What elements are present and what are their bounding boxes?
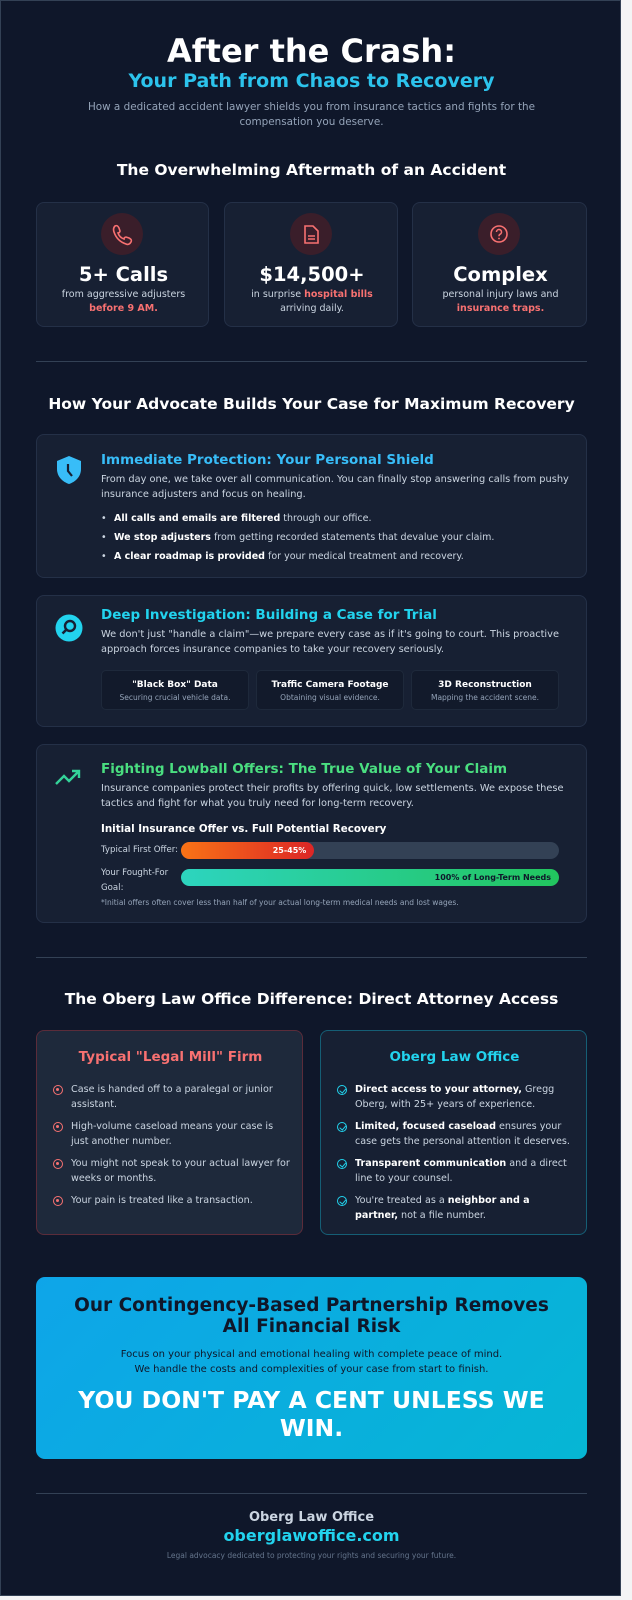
- CTA panel: We handle the costs and complexities of your case from start to finish.: [135, 1364, 488, 1375]
- list: positives: Limited, focused caseload ensures your case gets the personal attention it deserves.: [355, 1121, 570, 1147]
- icon: question: [478, 213, 520, 255]
- stat card: calls: from aggressive adjusters: [62, 289, 185, 300]
- bar chart: 25-45%: [273, 846, 306, 855]
- panel: immediate protection: Immediate Protection: Your Personal Shield: [101, 452, 434, 468]
- icon: document: [290, 213, 332, 255]
- evidence box: black box: [101, 670, 249, 710]
- footer: Oberg Law Office: [249, 1510, 374, 1525]
- investigation title: Deep Investigation: Building a Case for Trial: [101, 607, 437, 623]
- icon: shield: [57, 456, 81, 484]
- CTA panel: [36, 1277, 587, 1459]
- footer: Legal advocacy dedicated to protecting your rights and securing your future.: [167, 1551, 456, 1560]
- list: positives: partner, not a file number.: [355, 1210, 486, 1221]
- list: positives: You're treated as a neighbor and a: [355, 1195, 530, 1206]
- evidence box: black box: "Black Box" Data: [132, 680, 218, 690]
- evidence box: 3d: [411, 670, 559, 710]
- bar chart: [100, 823, 559, 907]
- bullet list: [102, 513, 494, 562]
- stat card: complex: personal injury laws and: [442, 289, 558, 300]
- heading: difference: The Oberg Law Office Difference: Direct Attorney Access: [65, 990, 558, 1008]
- bar chart: Typical First Offer:: [101, 845, 178, 855]
- list: negatives: High-volume caseload means your case is just another number.: [71, 1121, 273, 1147]
- CTA panel: All Financial Risk: [223, 1316, 400, 1337]
- list: positives: [337, 1084, 570, 1221]
- subtitle: Your Path from Chaos to Recovery: [128, 70, 495, 92]
- list: negatives: [53, 1084, 290, 1206]
- stat card: complex: Complex: [453, 263, 548, 286]
- evidence box: black box: Securing crucial vehicle data.: [120, 693, 230, 702]
- panel: immediate protection: [36, 434, 587, 578]
- stat card: calls: [36, 202, 209, 327]
- panel: oberg: [320, 1030, 587, 1235]
- bullet list: We stop adjusters from getting recorded statements that devalue your claim.: [114, 532, 494, 543]
- stat card: calls: before 9 AM.: [89, 303, 158, 314]
- stat card: calls: 5+ Calls: [79, 263, 168, 286]
- stat card: bills: in surprise hospital bills: [251, 289, 373, 300]
- CTA panel: Focus on your physical and emotional healing with complete peace of mind.: [121, 1349, 502, 1360]
- intro text: How a dedicated accident lawyer shields you from insurance tactics and fights for the compensation you deserve.: [88, 101, 535, 128]
- icon: trend up: [55, 770, 80, 785]
- evidence box: camera: Obtaining visual evidence.: [280, 693, 380, 702]
- evidence box: camera: Traffic Camera Footage: [271, 680, 389, 690]
- list: positives: Transparent communication and a direct line to your counsel.: [355, 1158, 567, 1184]
- bar chart: *Initial offers often cover less than half of your actual long-term medical needs and lost wages.: [101, 898, 459, 907]
- evidence box: 3d: Mapping the accident scene.: [431, 693, 539, 702]
- footer: oberglawoffice.com: [223, 1526, 400, 1545]
- panel: oberg: Oberg Law Office: [390, 1049, 519, 1065]
- stat card: complex: [412, 202, 587, 327]
- panel: lowball offers: Insurance companies protect their profits by offering quick, low settlements. We expose these tactics and fight for what you truly need for long-term recovery.: [101, 783, 564, 808]
- list: negatives: Your pain is treated like a transaction.: [71, 1195, 253, 1206]
- title: After the Crash:: [167, 32, 456, 70]
- bar chart: Your Fought-For: [101, 868, 168, 878]
- panel: legal mill: Typical "Legal Mill" Firm: [79, 1049, 262, 1065]
- panel: legal mill: [36, 1030, 303, 1235]
- CTA panel: Our Contingency-Based Partnership Removes: [74, 1295, 549, 1316]
- panel: immediate protection: From day one, we take over all communication. You can finally stop answering calls from pushy insurance adjusters and focus on healing.: [101, 474, 569, 500]
- panel: lowball offers: Fighting Lowball Offers: The True Value of Your Claim: [101, 761, 507, 777]
- stat card: bills: arriving daily.: [280, 303, 344, 314]
- heading: advocate: How Your Advocate Builds Your Case for Maximum Recovery: [48, 395, 575, 413]
- bar chart: 100% of Long-Term Needs: [435, 873, 551, 882]
- list: negatives: Case is handed off to a paralegal or junior assistant.: [71, 1084, 273, 1110]
- bar chart: Goal:: [101, 883, 123, 893]
- list: positives: Direct access to your attorney, Gregg Oberg, with 25+ years of experience.: [355, 1084, 554, 1110]
- panel: deep investigation: [36, 595, 587, 727]
- evidence box: 3d: 3D Reconstruction: [438, 680, 532, 690]
- stat card: bills: $14,500+: [259, 263, 365, 286]
- evidence box: camera: [256, 670, 404, 710]
- bar chart: Initial Insurance Offer vs. Full Potential Recovery: [101, 823, 386, 835]
- bullet list: A clear roadmap is provided for your medical treatment and recovery.: [114, 551, 464, 562]
- bullet list: All calls and emails are filtered through our office.: [114, 513, 371, 524]
- stat card: complex: insurance traps.: [457, 303, 544, 314]
- icon: phone: [101, 213, 143, 255]
- heading: aftermath: The Overwhelming Aftermath of an Accident: [117, 161, 506, 179]
- CTA panel: WIN.: [280, 1414, 343, 1442]
- icon: magnifier: [56, 614, 82, 642]
- stat card: bills: [224, 202, 398, 327]
- panel: lowball offers: [36, 744, 587, 923]
- investigation text: We don't just "handle a claim"—we prepare every case as if it's going to court. This proactive approach forces insurance companies to take your recovery seriously.: [101, 629, 559, 654]
- CTA panel: YOU DON'T PAY A CENT UNLESS WE: [78, 1386, 545, 1414]
- footer: [167, 1510, 456, 1560]
- list: negatives: You might not speak to your actual lawyer for weeks or months.: [71, 1158, 290, 1184]
